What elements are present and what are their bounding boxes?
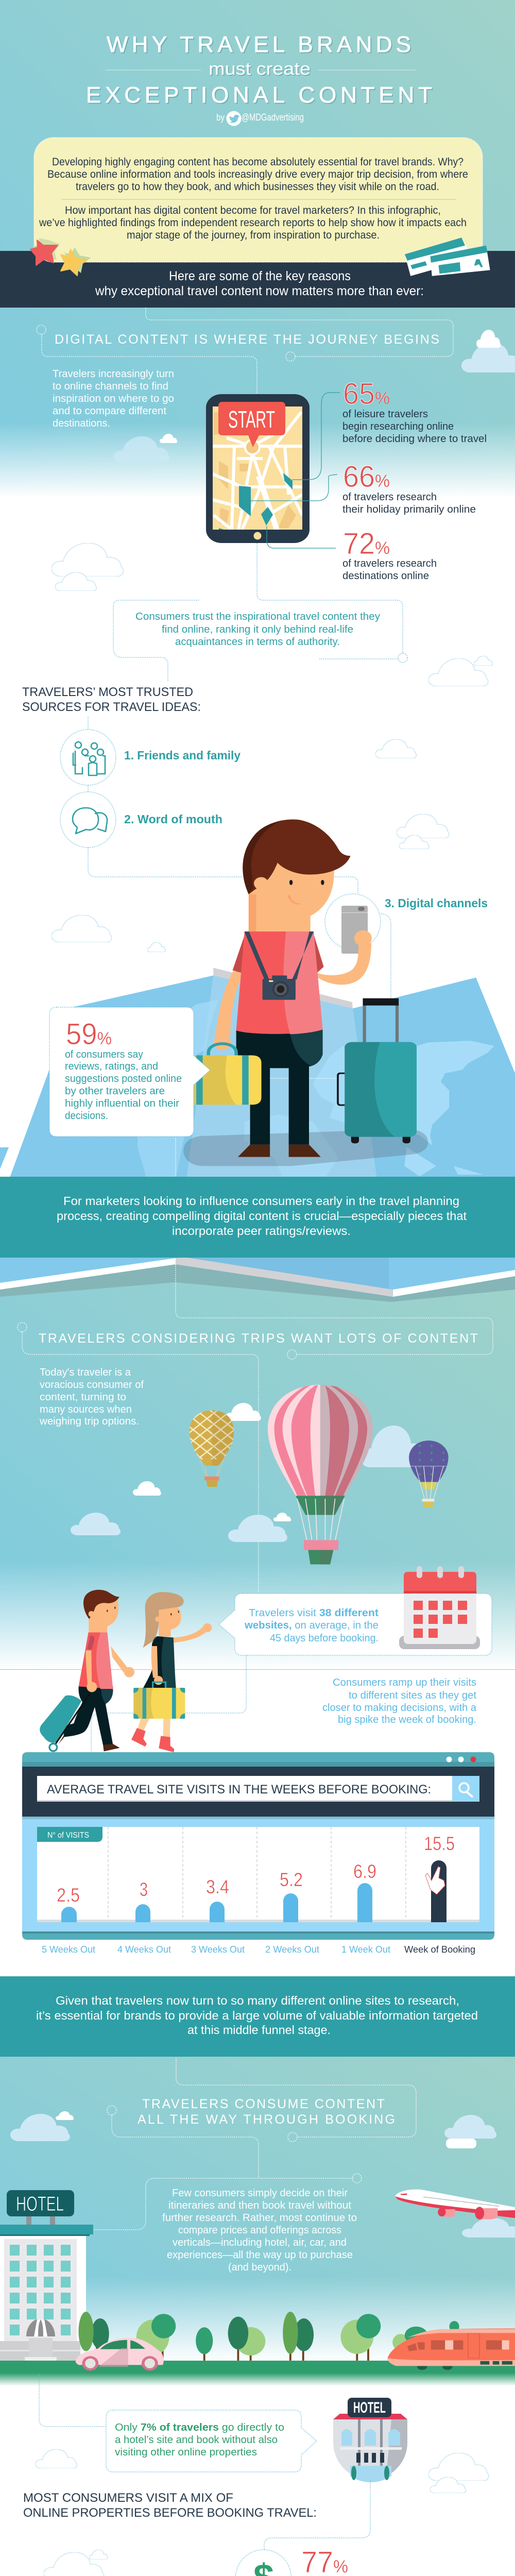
title: EXCEPTIONAL CONTENT xyxy=(86,82,432,108)
icon: yellow starfish xyxy=(61,247,91,276)
panel: digital content is where the journey begins xyxy=(0,308,515,1258)
dark band xyxy=(0,251,515,308)
values: 3.4 xyxy=(206,1876,229,1897)
clouds xyxy=(52,330,515,591)
intro text box: Developing highly engaging content has become absolutely essential for travel brands. Why? xyxy=(52,156,464,168)
stat 72%: of travelers research xyxy=(342,558,437,569)
intro paragraph: inspiration on where to go xyxy=(53,393,174,404)
bars xyxy=(61,1860,447,1922)
traveler figure xyxy=(194,820,417,1157)
icon: cursor hand xyxy=(425,1867,445,1894)
teal summary band 2 xyxy=(0,1976,515,2057)
trust callout: acquaintances in terms of authority. xyxy=(175,636,340,648)
heading with dotted frame xyxy=(107,2058,416,2178)
intro paragraph: to online channels to find xyxy=(53,381,168,392)
intro text box: major stage of the journey, from inspiration to purchase. xyxy=(127,229,380,241)
title xyxy=(86,32,432,108)
title: must create xyxy=(209,59,311,79)
week labels: 5 Weeks Out xyxy=(42,1944,95,1955)
week labels: 3 Weeks Out xyxy=(191,1944,245,1955)
paragraph with dotted frame: itineraries and then book travel without xyxy=(168,2200,351,2211)
teal summary band 2: it’s essential for brands to provide a large volume of valuable information targeted xyxy=(36,2009,478,2022)
intro paragraph: voracious consumer of xyxy=(40,1379,144,1391)
callout: 59% of consumers: suggestions posted online xyxy=(65,1073,182,1084)
heading with dotted frame: TRAVELERS CONSUME CONTENT xyxy=(142,2097,385,2111)
airplane xyxy=(395,2189,515,2219)
values: 6.9 xyxy=(353,1861,376,1882)
clouds xyxy=(10,2111,515,2238)
heading: mix of online properties: ONLINE PROPERTIES BEFORE BOOKING TRAVEL: xyxy=(23,2506,317,2520)
start pin xyxy=(218,402,285,447)
heading with dotted frame: TRAVELERS CONSIDERING TRIPS WANT LOTS OF CONTENT xyxy=(39,1331,478,1346)
values: 3 xyxy=(140,1879,148,1900)
trust callout: find online, ranking it only behind real-life xyxy=(162,624,353,635)
callout: 38 different websites xyxy=(219,1594,492,1655)
source 1: friends and family: 1. Friends and family xyxy=(124,749,241,762)
body xyxy=(214,930,372,1157)
stat 66%: their holiday primarily online xyxy=(342,504,476,515)
values: 15.5 xyxy=(424,1833,455,1854)
source 3: digital channels: 3. Digital channels xyxy=(385,896,488,910)
car xyxy=(76,2338,164,2370)
stat 72% xyxy=(342,527,437,582)
panel: travelers considering trips want lots of content xyxy=(0,1258,515,2057)
callout: 59% of consumers xyxy=(49,1007,210,1137)
icon: small hotel xyxy=(333,2398,407,2482)
map fragment xyxy=(0,1147,9,1169)
train xyxy=(387,2329,515,2370)
source 2: word of mouth: 2. Word of mouth xyxy=(124,812,222,826)
yellow bag xyxy=(194,1044,262,1105)
heading: mix of online properties: MOST CONSUMERS VISIT A MIX OF xyxy=(23,2491,233,2505)
search bar title xyxy=(37,1776,479,1802)
panel: intro header xyxy=(0,0,515,508)
stat 65% xyxy=(342,377,487,445)
byline with twitter icon: by xyxy=(216,112,225,123)
outline clouds xyxy=(52,656,492,952)
week labels: 4 Weeks Out xyxy=(117,1944,171,1955)
folded map edge xyxy=(0,1258,515,1302)
world map xyxy=(10,968,515,1177)
teal summary band 2: at this middle funnel stage. xyxy=(187,2023,331,2037)
intro text box: travelers go to how they book, and which businesses they visit while on the road. xyxy=(76,181,439,193)
callout: only 7% of travelers: a hotel’s site and book without also xyxy=(115,2434,278,2446)
browser bar chart xyxy=(22,1752,494,1955)
intro text box: Because online information and tools increasingly drive every major trip decision, from where xyxy=(47,168,468,180)
hotel sign xyxy=(7,2190,74,2226)
intro text box: we’ve highlighted findings from independent research reports to help show how it impacts each xyxy=(39,217,467,229)
heading: trusted sources: TRAVELERS’ MOST TRUSTED xyxy=(22,685,193,699)
stat 65%: begin researching online xyxy=(342,421,454,432)
stat 72%: 72% xyxy=(343,527,390,561)
intro closing text: Here are some of the key reasons xyxy=(169,269,351,283)
intro paragraph: Today's traveler is a xyxy=(40,1367,131,1378)
intro text box xyxy=(34,138,483,262)
camera xyxy=(263,975,296,1000)
paragraph with dotted frame: (and beyond). xyxy=(228,2262,291,2273)
callout: 59% of consumers: reviews, ratings, and xyxy=(65,1061,158,1072)
callout: 59% of consumers: highly influential on their xyxy=(65,1098,179,1109)
icon: speech bubbles xyxy=(73,808,107,834)
stat 66% xyxy=(342,460,476,515)
chart area xyxy=(37,1827,479,1922)
byline with twitter icon xyxy=(216,111,304,126)
woman xyxy=(131,1592,212,1752)
paragraph: consumers ramp up xyxy=(322,1677,477,1725)
callout: 59% of consumers: decisions. xyxy=(65,1110,108,1122)
week labels: Week of Booking xyxy=(404,1944,475,1955)
icon: red starfish xyxy=(30,238,60,265)
paragraph with dotted frame: further research. Rather, most continue to xyxy=(162,2212,357,2224)
callout: 59% of consumers: by other travelers are xyxy=(65,1086,165,1097)
stat 65%: 65% xyxy=(343,377,390,411)
browser frame xyxy=(22,1752,494,1940)
connector lines xyxy=(251,393,340,548)
teal summary band 1: For marketers looking to influence consumers early in the travel planning xyxy=(63,1194,459,1208)
paragraph: consumers ramp up: to different sites as they get xyxy=(349,1690,476,1701)
intro paragraph: and to compare different xyxy=(53,405,166,417)
icon: family xyxy=(73,742,105,775)
paragraph: consumers ramp up: Consumers ramp up their visits xyxy=(333,1677,476,1688)
week labels xyxy=(42,1944,475,1955)
teal summary band 2: Given that travelers now turn to so many different online sites to research, xyxy=(56,1994,459,2007)
balloons xyxy=(190,1385,449,1564)
week labels: 2 Weeks Out xyxy=(265,1944,319,1955)
trust callout xyxy=(113,543,407,681)
source 1: friends and family xyxy=(60,730,241,785)
callout: 38 different websites: websites, on average, in the xyxy=(244,1620,379,1631)
heading: trusted sources: SOURCES FOR TRAVEL IDEAS: xyxy=(22,700,201,714)
values xyxy=(57,1833,455,1906)
callout: only 7% of travelers: visiting other online properties xyxy=(115,2447,257,2458)
intro paragraph: many sources when xyxy=(40,1404,132,1415)
couple walking xyxy=(40,1590,212,1752)
icon: calendar xyxy=(399,1566,480,1649)
byline with twitter icon: @MDGadvertising xyxy=(242,112,304,123)
icon: small hotel: HOTEL xyxy=(353,2399,386,2416)
outline clouds xyxy=(36,2449,489,2576)
ground xyxy=(0,2361,515,2386)
intro paragraph xyxy=(39,1367,144,1427)
heading with dotted frame xyxy=(37,308,453,394)
stat 65%: before deciding where to travel xyxy=(342,433,487,445)
trust callout: Consumers trust the inspirational travel content they xyxy=(135,611,380,622)
heading with dotted frame: ALL THE WAY THROUGH BOOKING xyxy=(138,2112,395,2127)
stat 65%: of leisure travelers xyxy=(342,409,428,420)
paragraph with dotted frame: Few consumers simply decide on their xyxy=(172,2188,348,2199)
teal summary band 1: incorporate peer ratings/reviews. xyxy=(172,1224,351,1238)
paragraph: consumers ramp up: closer to making decisions, with a xyxy=(322,1702,477,1714)
trees xyxy=(78,2312,459,2361)
values: 2.5 xyxy=(57,1885,80,1906)
source 2: word of mouth xyxy=(60,792,222,848)
axis tab xyxy=(37,1827,102,1842)
paragraph: consumers ramp up: big spike the week of booking. xyxy=(338,1714,476,1725)
teal summary band 1 xyxy=(0,1177,515,1258)
stat 66%: 66% xyxy=(343,460,390,494)
icon: tickets xyxy=(405,238,490,276)
paragraph with dotted frame: verticals—including hotel, air, car, and xyxy=(173,2237,347,2248)
suitcase xyxy=(338,998,417,1143)
clouds xyxy=(71,1403,426,1542)
icon: phone xyxy=(341,906,368,954)
stat 77% metasearch xyxy=(236,2546,443,2576)
callout: 59% of consumers: of consumers say xyxy=(65,1049,143,1060)
stat 66%: of travelers research xyxy=(342,492,437,503)
hotel building xyxy=(0,2190,93,2361)
balloon: pink xyxy=(268,1385,373,1564)
teal map blocks xyxy=(219,473,293,530)
intro paragraph: destinations. xyxy=(53,418,110,429)
paragraph with dotted frame xyxy=(94,2174,362,2273)
man xyxy=(40,1590,134,1751)
paragraph with dotted frame: compare prices and offerings across xyxy=(178,2225,341,2236)
intro closing text xyxy=(95,269,424,298)
teal summary band 1: process, creating compelling digital content is crucial—especially pieces that xyxy=(57,1209,467,1223)
source 3: digital channels xyxy=(325,894,488,954)
intro paragraph xyxy=(53,368,174,429)
hotel sign: HOTEL xyxy=(16,2193,64,2215)
balloon: purple xyxy=(409,1440,449,1507)
search bar title: AVERAGE TRAVEL SITE VISITS IN THE WEEKS BEFORE BOOKING: xyxy=(47,1783,431,1797)
callout: 59% of consumers: 59% xyxy=(66,1018,112,1051)
title: WHY TRAVEL BRANDS xyxy=(107,32,411,57)
axis tab: N° of VISITS xyxy=(47,1831,89,1840)
paragraph with dotted frame: experiences—all the way up to purchase xyxy=(167,2249,353,2261)
balloon: gold xyxy=(190,1411,234,1487)
callout: only 7% of travelers: Only 7% of travelers go directly to xyxy=(115,2422,284,2433)
panel: travelers consume content all the way through booking xyxy=(0,2057,515,2576)
values: 5.2 xyxy=(280,1869,303,1890)
tablet with map xyxy=(206,394,310,543)
stat 72%: destinations online xyxy=(342,570,429,582)
intro paragraph: content, turning to xyxy=(40,1392,126,1403)
intro text box: How important has digital content become for travel marketers? In this infographic, xyxy=(65,205,441,216)
intro paragraph: weighing trip options. xyxy=(39,1416,139,1427)
intro paragraph: Travelers increasingly turn xyxy=(53,368,174,380)
callout: 38 different websites: Travelers visit 38 different xyxy=(249,1607,379,1619)
heading: mix of online properties xyxy=(23,2491,317,2520)
start pin: START xyxy=(228,406,275,433)
intro closing text: why exceptional travel content now matters more than ever: xyxy=(95,284,424,298)
heading: trusted sources xyxy=(22,685,201,714)
callout: 38 different websites: 45 days before booking. xyxy=(270,1633,379,1644)
head xyxy=(243,820,351,934)
heading with dotted frame xyxy=(18,1264,493,1593)
week labels: 1 Week Out xyxy=(341,1944,390,1955)
callout: only 7% of travelers xyxy=(39,2375,317,2472)
heading with dotted frame: DIGITAL CONTENT IS WHERE THE JOURNEY BEGINS xyxy=(55,332,439,347)
